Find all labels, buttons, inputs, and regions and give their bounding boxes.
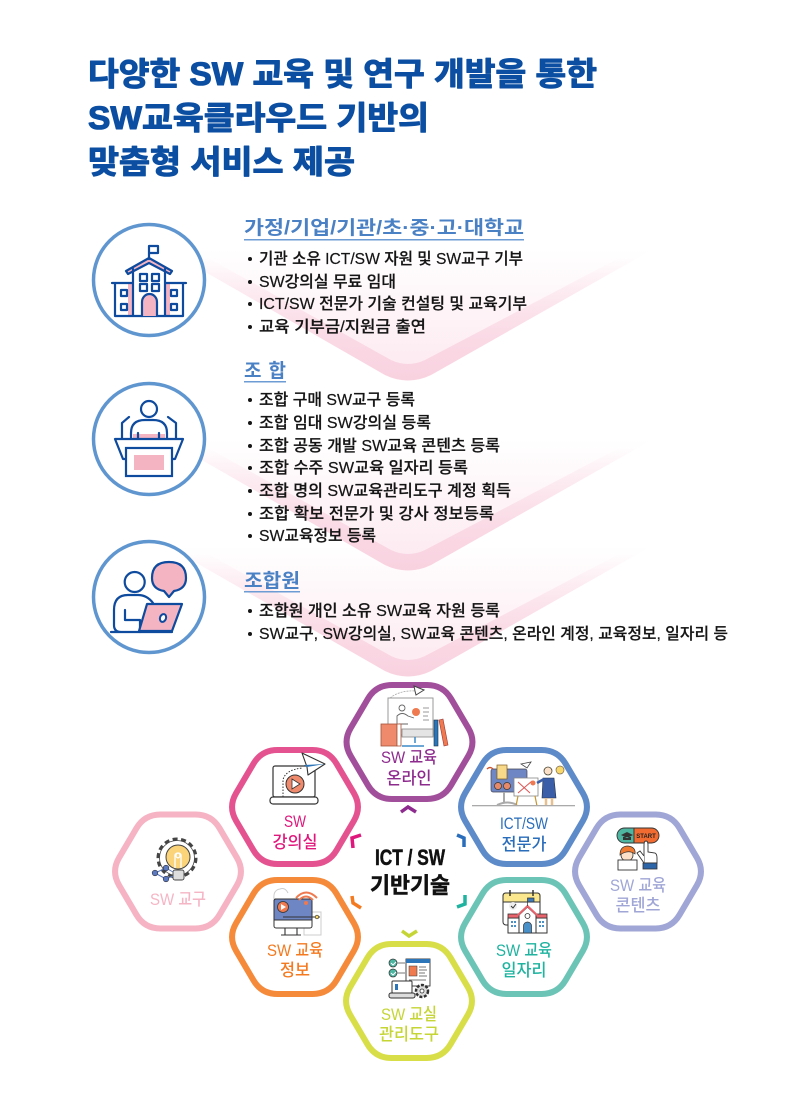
pink chevron background (167, 200, 657, 676)
hexagon: SW 교육 정보 (232, 880, 358, 994)
text block: 가정/기업/기관: SW강의실 무료 임대 (259, 273, 396, 291)
hexagon: SW 교육 콘텐츠: SW 교육 (610, 876, 666, 895)
text block: 가정/기업/기관: 가정/기업/기관/초·중·고·대학교 (244, 217, 524, 239)
text block: 조합원: 조합원 (244, 570, 300, 592)
arrow: blue corner (457, 835, 464, 847)
hexagon: ICT/SW 전문가 (461, 750, 587, 864)
icon: member with laptop (94, 542, 204, 652)
text block: 조합: SW교육정보 등록 (259, 527, 376, 545)
hexagon: ICT/SW 전문가: ICT/SW (500, 814, 548, 833)
hexagon: SW 강의실: 강의실 (272, 833, 318, 852)
hexagon: SW 교실 관리도구: SW 교실 (381, 1005, 437, 1024)
hexagon: SW 교육 온라인: SW 교육 (381, 748, 437, 767)
text block: 조합원 (244, 570, 728, 643)
icon: info monitor (274, 888, 321, 935)
icon: online lecture (381, 686, 448, 746)
text block: 조합: 조합 공동 개발 SW교육 콘텐츠 등록 (259, 437, 500, 455)
hexagon: SW 교구 (115, 814, 241, 928)
text block: 조합: 조합 명의 SW교육관리도구 계정 획득 (259, 482, 511, 500)
hexagon: SW 교실 관리도구: 관리도구 (379, 1025, 439, 1044)
hexagon: SW 교육 일자리: 일자리 (502, 961, 546, 980)
text block: 조합: 조 합 (244, 360, 286, 382)
hexagon: SW 교육 정보: 정보 (280, 961, 310, 980)
hexagon: SW 교실 관리도구 (346, 944, 472, 1058)
icon: gear bulb (152, 839, 196, 882)
text block: 조합: 조합 임대 SW강의실 등록 (259, 414, 431, 432)
center label: ICT / SW 기반기술 (370, 845, 450, 898)
hexagon: SW 교육 일자리: SW 교육 (496, 941, 552, 960)
arrow: purple up (401, 807, 416, 812)
text block: 조합 (244, 360, 511, 545)
hexagon: SW 강의실 (232, 750, 358, 864)
title: 다양한 SW 교육 및 연구 개발을 통한 (88, 56, 597, 92)
icon: management tool (389, 959, 430, 998)
hexagon: SW 교육 콘텐츠 (575, 814, 701, 928)
text block: 가정/기업/기관: 기관 소유 ICT/SW 자원 및 SW교구 기부 (259, 250, 523, 268)
icon: school (94, 224, 204, 336)
text block: 조합: 조합 수주 SW교육 일자리 등록 (259, 459, 468, 477)
text block: 조합원: SW교구, SW강의실, SW교육 콘텐츠, 온라인 계정, 교육정보, 일자리 등 (259, 625, 728, 643)
hexagon: SW 교육 온라인 (347, 685, 472, 799)
icon: calendar school (503, 890, 547, 933)
hexagon: ICT/SW 전문가: 전문가 (502, 835, 547, 854)
icon: lectern speaker (94, 384, 204, 494)
arrow: teal corner (457, 895, 465, 907)
text block: 조합원: 조합원 개인 소유 SW교육 자원 등록 (259, 602, 500, 620)
text block: 조합: 조합 확보 전문가 및 강사 정보등록 (259, 505, 494, 523)
center label: ICT / SW 기반기술: ICT / SW (375, 845, 445, 870)
text block: 가정/기업/기관: 교육 기부금/지원금 출연 (259, 318, 426, 336)
arrow: pink corner (352, 835, 361, 848)
hexagon: SW 교육 정보: SW 교육 (267, 941, 323, 960)
arrow: lime down (402, 931, 417, 936)
hexagon: SW 교육 콘텐츠: 콘텐츠 (616, 896, 660, 915)
hexagon: SW 교육 온라인: 온라인 (386, 769, 432, 788)
title: SW교육클라우드 기반의 (88, 100, 429, 136)
text block: 조합: 조합 구매 SW교구 등록 (259, 391, 415, 409)
title: 맞춤형 서비스 제공 (88, 144, 355, 180)
title (88, 56, 597, 180)
icon: video laptop (270, 753, 325, 804)
arrow: orange corner (352, 896, 361, 908)
hexagon: SW 교육 일자리 (461, 880, 587, 994)
icon: start button: START (636, 834, 656, 840)
text block: 가정/기업/기관 (244, 217, 527, 336)
icon: ICT expert (472, 762, 575, 806)
text block: 가정/기업/기관: ICT/SW 전문가 기술 컨설팅 및 교육기부 (259, 295, 527, 313)
hexagon: SW 교구: SW 교구 (150, 890, 206, 909)
center label: ICT / SW 기반기술: 기반기술 (370, 873, 450, 898)
hexagon: SW 강의실: SW (284, 812, 306, 831)
